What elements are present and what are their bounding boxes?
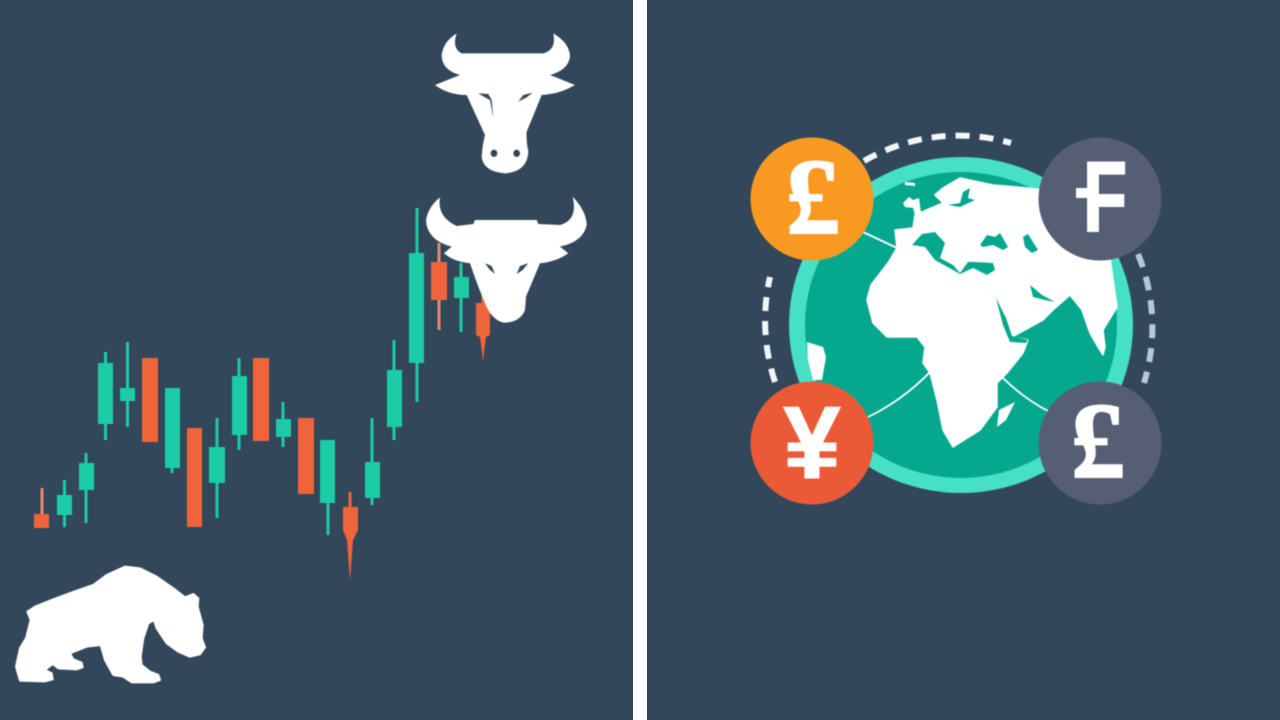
coin: yen red: ¥	[784, 386, 841, 500]
islands	[807, 182, 1015, 427]
globe	[789, 157, 1133, 493]
coin: pound grey: £	[1071, 382, 1125, 501]
dashed orbit ring	[765, 136, 1152, 383]
icon: bull head lower	[426, 197, 587, 323]
coin: franc grey	[1038, 138, 1162, 260]
Eurasia and Africa landmass	[867, 178, 1117, 447]
coin: yen red	[750, 382, 874, 504]
coin: pound grey	[1038, 382, 1162, 504]
icon: bull head top	[435, 33, 575, 173]
inland seas	[912, 188, 1055, 343]
icon: bear silhouette	[16, 567, 205, 682]
panel: world currencies	[750, 136, 1162, 505]
panel divider	[633, 0, 647, 720]
panel: stock market	[16, 33, 587, 682]
coin link lines	[863, 232, 1048, 417]
coin: pound orange	[750, 138, 874, 260]
coin: franc grey: F	[1083, 141, 1127, 252]
candlestick chart	[34, 208, 490, 581]
coin: pound orange: £	[786, 138, 840, 257]
Italy peninsula	[945, 233, 962, 258]
